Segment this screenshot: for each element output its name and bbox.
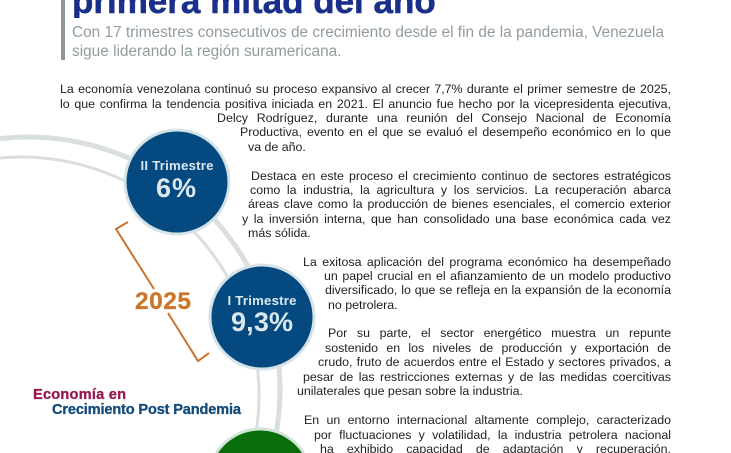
paragraph 1: Delcy Rodríguez, durante una reunión del Consejo Nacional de Economía <box>217 111 671 125</box>
header accent bar <box>61 0 65 60</box>
paragraph 2: más sólida. <box>248 226 311 240</box>
circle: I Trimestre <box>210 265 314 369</box>
timeline arcs <box>0 137 280 453</box>
paragraph 1 <box>60 82 671 154</box>
paragraph 3: diversificado, lo que se refleja en la expansión de la economía <box>325 283 671 297</box>
paragraph 2: áreas clave como la producción de bienes esenciales, el comercio exterior <box>248 197 671 211</box>
subtitle <box>72 24 664 60</box>
paragraph 3: un papel crucial en el afianzamiento de un modelo productivo <box>324 269 671 283</box>
paragraph 1: La economía venezolana continuó su proceso expansivo al crecer 7,7% durante el primer semestre de 2025, <box>60 82 671 96</box>
paragraph 5 <box>304 413 671 453</box>
paragraph 3 <box>303 255 671 312</box>
paragraph 4 <box>297 326 671 398</box>
paragraph 2 <box>242 169 671 240</box>
paragraph 5: por fluctuaciones y volatilidad, la industria petrolera nacional <box>314 428 671 442</box>
circle: I Trimestre: I Trimestre <box>228 293 296 308</box>
paragraph 3: no petrolera. <box>328 298 398 312</box>
paragraph 1: lo que confirma la tendencia positiva iniciada en 2021. El anuncio fue hecho por la vicepresidenta ejecutiva, <box>60 97 671 111</box>
paragraph 2: y la inversión interna, que han consolidado una base económica cada vez <box>242 212 671 226</box>
paragraph 1: va de año. <box>248 140 306 154</box>
circle: II Trimestre <box>125 130 229 234</box>
circle: II Trimestre: II Trimestre <box>140 158 214 173</box>
circle: I Trimestre: 9,3% <box>231 307 293 337</box>
paragraph 3: La exitosa aplicación del programa económico ha desempeñado <box>303 255 671 269</box>
subtitle: Con 17 trimestres consecutivos de crecimiento desde el fin de la pandemia, Venezuela <box>72 24 664 41</box>
paragraph 4: pesar de las restricciones externas y de las medidas coercitivas <box>303 370 671 384</box>
paragraph 4: crudo, fruto de acuerdos entre el Estado y sectores privados, a <box>318 355 671 369</box>
paragraph 5: En un entorno internacional altamente complejo, caracterizado <box>304 413 671 427</box>
subtitle: sigue liderando la región suramericana. <box>72 43 342 60</box>
circle: green quarter <box>216 429 304 453</box>
orange bracket <box>116 222 209 361</box>
paragraph 4: Por su parte, el sector energético muestra un repunte <box>328 326 671 340</box>
year label: 2025 <box>135 288 191 315</box>
caption: Economía en: Economía en <box>33 387 126 403</box>
paragraph 2: como la industria, la agricultura y los servicios. La recuperación abarca <box>250 183 671 197</box>
paragraph 2: Destaca en este proceso el crecimiento continuo de sectores estratégicos <box>251 169 671 183</box>
paragraph 4: unilaterales que pesan sobre la industria. <box>297 384 523 398</box>
paragraph 4: sostenido en los niveles de producción y exportación de <box>325 341 671 355</box>
circle: II Trimestre: 6% <box>156 173 196 203</box>
caption: Crecimiento Post Pandemia: Crecimiento Post Pandemia <box>52 402 242 418</box>
paragraph 1: Productiva, evento en el que se evaluó el desempeño económico en lo que <box>240 125 671 139</box>
